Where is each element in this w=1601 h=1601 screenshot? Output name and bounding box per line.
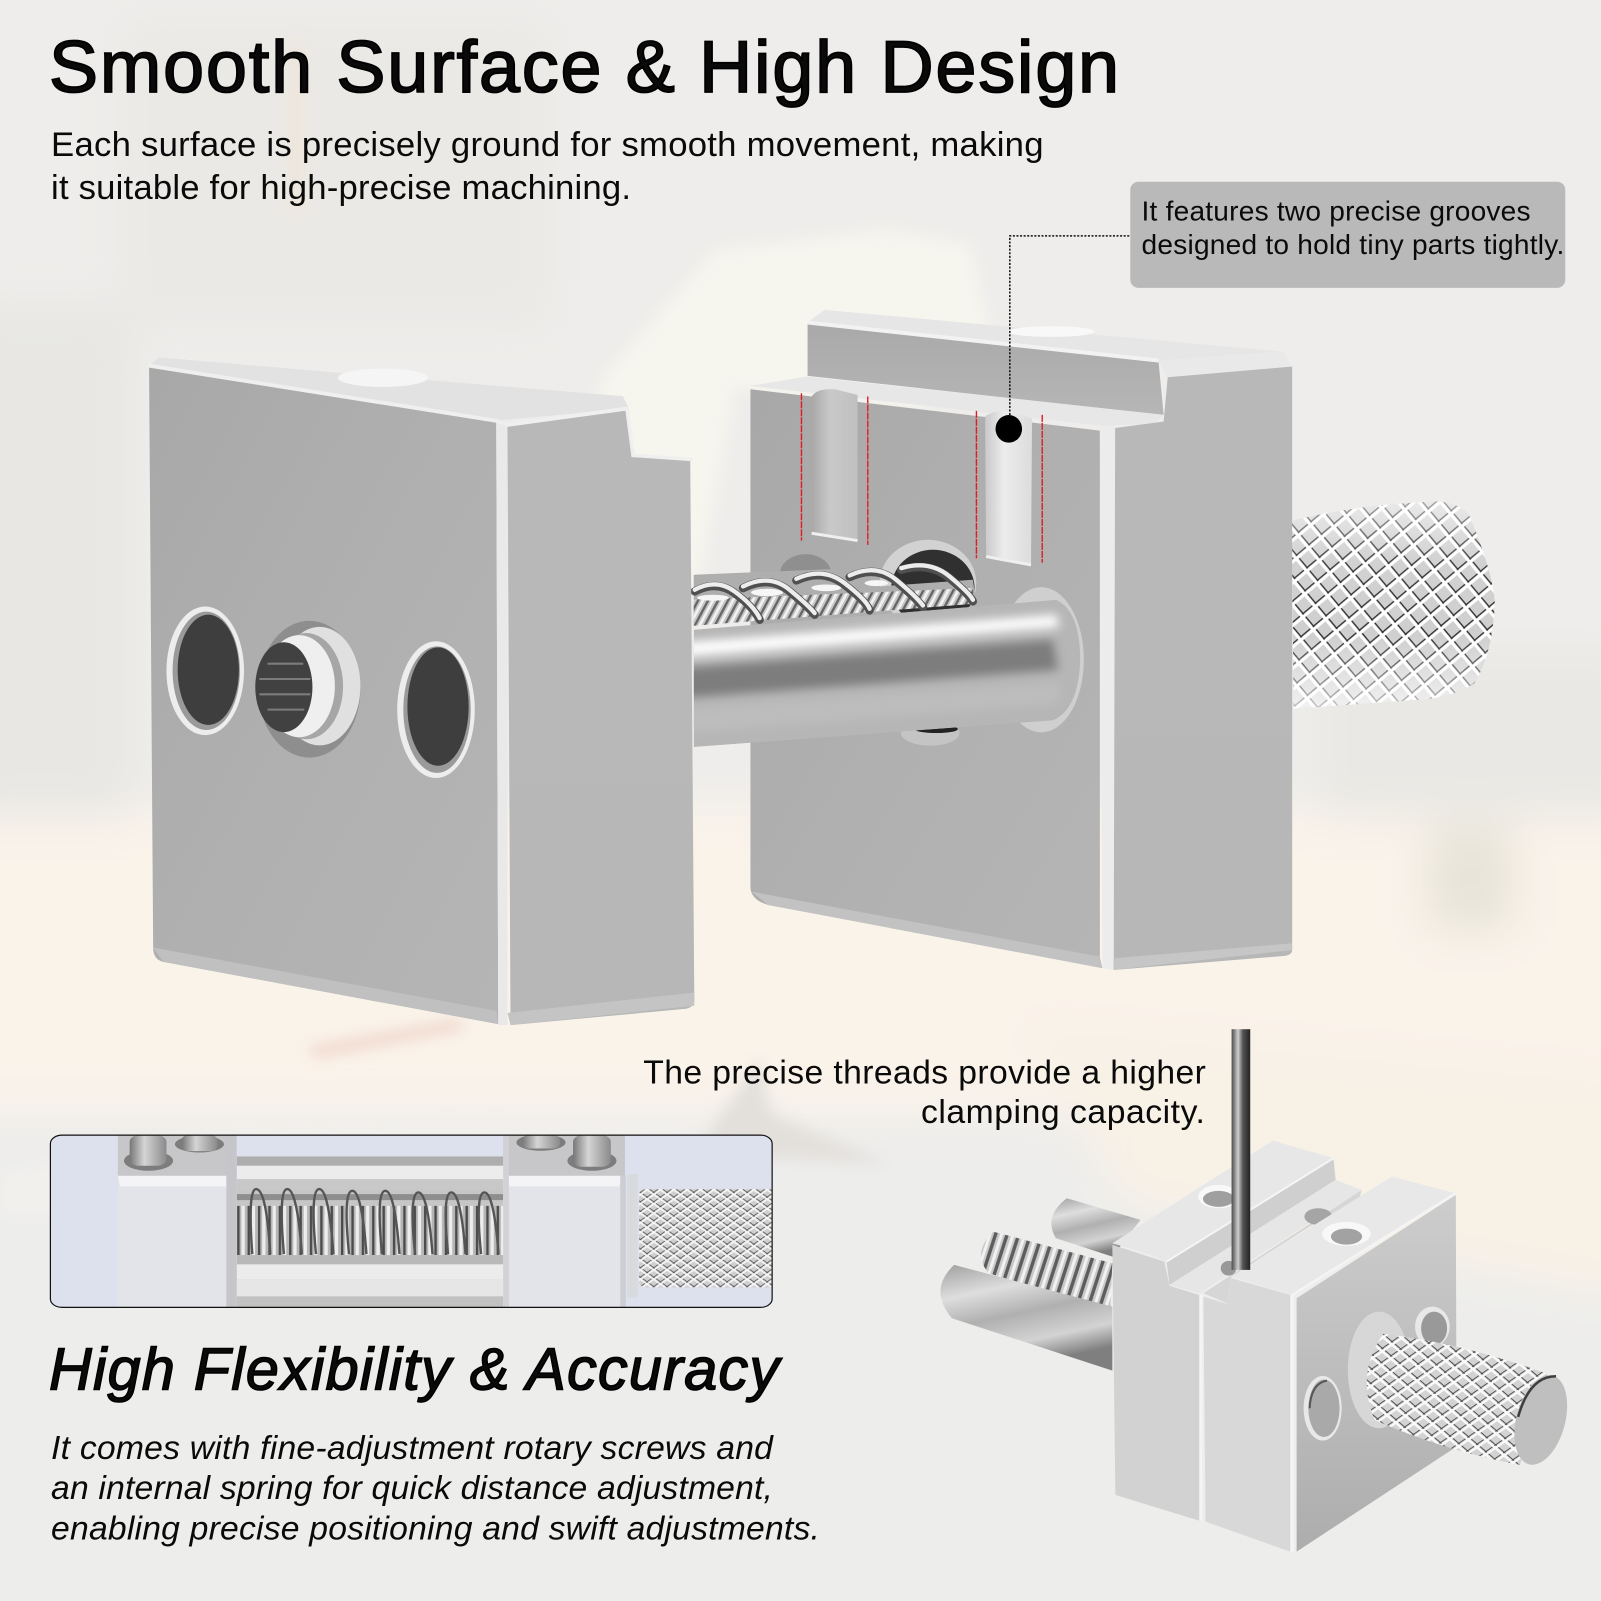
bolt below rod [901, 720, 960, 746]
right slab top [1232, 1177, 1455, 1295]
right slab ledge [1203, 1190, 1362, 1303]
heading: flexibility: High Flexibility & Accuracy [49, 1336, 782, 1403]
main product: knurled knob [1292, 501, 1495, 709]
spring [237, 1206, 503, 1255]
left slab top [1112, 1141, 1333, 1262]
inset photo: spring close-up [50, 1134, 776, 1307]
left slab ledge [1170, 1180, 1362, 1293]
body text: flexibility: enabling precise positioning and swift adjustments. [51, 1511, 820, 1548]
body text: flexibility [51, 1430, 820, 1548]
threads caption: clamping capacity. [921, 1094, 1205, 1131]
groove 1 [812, 389, 858, 541]
main product: spring and guide rod [680, 540, 1084, 747]
hole in side face upper [1415, 1307, 1450, 1347]
main product: left jaw [149, 357, 694, 1025]
lower rails [237, 1255, 503, 1264]
rails between jaws [237, 1156, 503, 1307]
knurled knob [1367, 1334, 1550, 1465]
threads caption [643, 1054, 1206, 1131]
rear rod [1051, 1198, 1141, 1257]
hole in side face lower [1304, 1376, 1342, 1441]
outer coils [695, 565, 973, 620]
left face of right jaw [750, 389, 1100, 967]
right jaw top view [503, 1194, 504, 1200]
pins [124, 1134, 616, 1171]
left slab rail wall [1167, 1158, 1336, 1285]
bright corner edge [1100, 425, 1115, 970]
inner coils [694, 588, 975, 626]
groove 2 [985, 411, 1032, 565]
top surface of right jaw [808, 310, 1281, 361]
hole on top of left jaw [338, 369, 428, 387]
ring around knob base [1348, 1312, 1410, 1428]
bright corner edge [496, 419, 507, 1025]
ledge of right jaw [750, 377, 1164, 426]
right face of left jaw [507, 410, 694, 1025]
callout: grooves [1130, 182, 1565, 288]
right face of right jaw [1114, 367, 1292, 970]
left jaw top view [236, 1156, 237, 1200]
knob end cap [1506, 1372, 1575, 1468]
rod collar [999, 587, 1084, 732]
screw in center hole [255, 621, 360, 758]
callout: grooves: designed to hold tiny parts tightly. [1142, 229, 1564, 260]
bottom chamfer [153, 948, 498, 1024]
front guide rod [680, 600, 1080, 747]
bottom chamfer [751, 892, 1102, 968]
leader line to groove [996, 236, 1129, 443]
top hole 1 [1198, 1185, 1239, 1208]
small product: assembled vise with hex key [940, 1029, 1575, 1552]
magnet hole right [397, 641, 475, 778]
body text: flexibility: an internal spring for quick distance adjustment, [51, 1470, 773, 1507]
intro text [51, 126, 1044, 207]
notch and edges [149, 366, 692, 459]
body text: flexibility: It comes with fine-adjustment rotary screws and [51, 1430, 774, 1467]
spring shaft [694, 569, 976, 623]
threads caption: The precise threads provide a higher [643, 1054, 1206, 1091]
hole on top of right jaw [1008, 326, 1095, 337]
rear rail of right jaw [808, 323, 1164, 415]
groove end highlights [812, 533, 1031, 565]
threaded screw [981, 1232, 1112, 1310]
knob [639, 1189, 776, 1287]
intro text: it suitable for high-precise machining. [51, 169, 631, 207]
gaps in spring [697, 580, 888, 601]
left face of left jaw [149, 368, 498, 1024]
middle hole [1304, 1208, 1332, 1225]
top of right block section [1159, 352, 1292, 378]
callout: grooves: It features two precise grooves [1142, 196, 1531, 227]
red guide lines [801, 393, 1042, 563]
knob flange [627, 1174, 638, 1297]
top surface of left jaw [149, 357, 629, 421]
rear hole rings [780, 554, 832, 595]
magnet hole left [166, 607, 244, 735]
top hole 2 [1322, 1222, 1371, 1246]
title: Smooth Surface & High Design [49, 25, 1119, 108]
left slab face [1112, 1245, 1199, 1521]
front rod [940, 1265, 1112, 1371]
bright edges [1291, 1295, 1294, 1552]
intro text: Each surface is precisely ground for smooth movement, making [51, 126, 1044, 164]
main product: right jaw [750, 310, 1292, 970]
right slab face [1203, 1278, 1290, 1552]
hex key [1232, 1029, 1250, 1270]
big side face [1297, 1195, 1457, 1552]
